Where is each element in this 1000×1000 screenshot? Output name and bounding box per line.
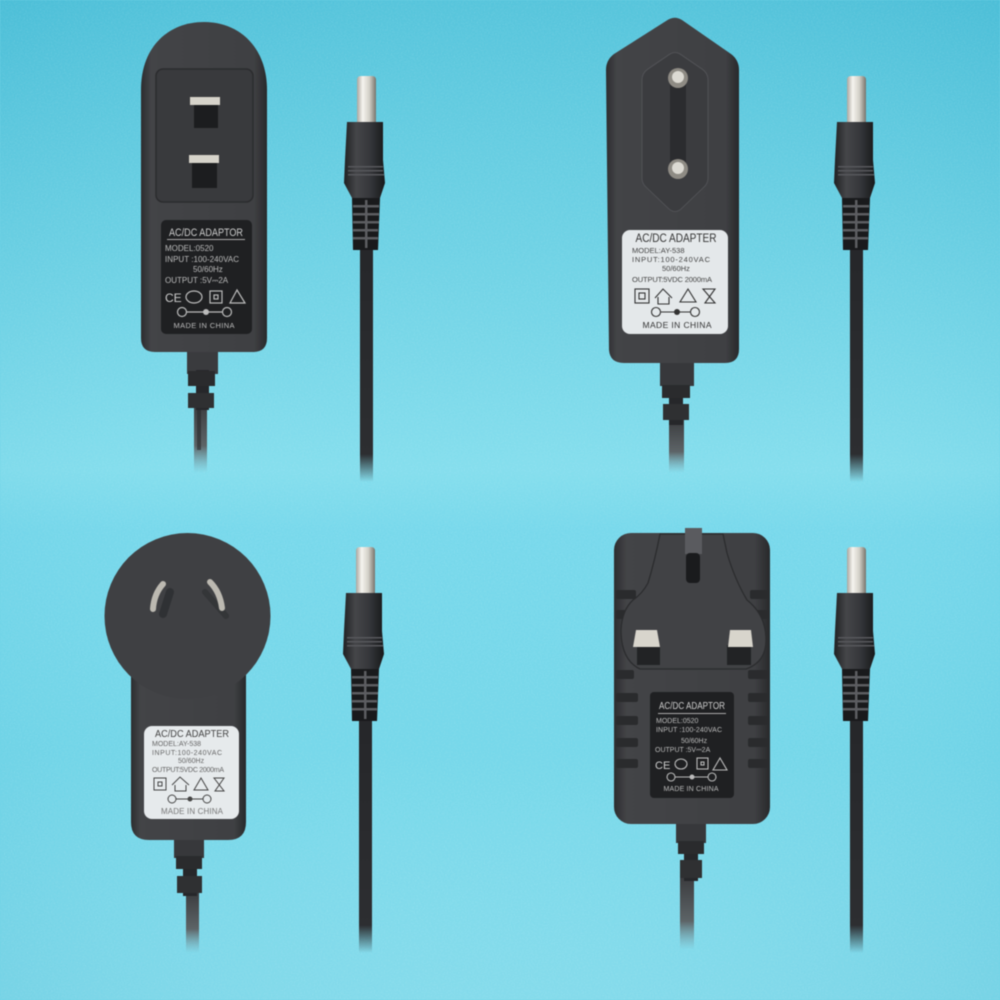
pins xyxy=(668,68,688,179)
rating label: MODEL:AY-538 xyxy=(152,741,201,748)
plug face xyxy=(621,534,766,669)
rating label: INPUT :100-240VAC xyxy=(165,255,239,264)
rating label: 50/60Hz xyxy=(193,265,223,274)
rating label: 50/60Hz xyxy=(681,738,708,745)
rating label: MADE IN CHINA xyxy=(642,320,712,330)
adapter: UK plug xyxy=(614,528,770,950)
rating label: MADE IN CHINA xyxy=(664,786,719,793)
housing xyxy=(141,22,267,352)
line pins xyxy=(633,630,753,665)
rating label: AC/DC ADAPTOR xyxy=(659,700,725,712)
rating label: 50/60Hz xyxy=(178,758,205,765)
rating label: AC/DC ADAPTOR xyxy=(169,227,243,239)
rating label xyxy=(144,726,239,819)
rating label: INPUT:100-240VAC xyxy=(152,750,222,757)
rating label: OUTPUT:5VDC 2000mA xyxy=(632,275,712,284)
adapter: EU plug xyxy=(606,18,739,473)
housing xyxy=(131,670,246,840)
rating label: INPUT :100-240VAC xyxy=(656,727,722,734)
prongs xyxy=(189,97,220,188)
housing xyxy=(606,18,739,363)
plug recess xyxy=(156,69,253,202)
cord and strain relief xyxy=(174,838,204,953)
rating label xyxy=(622,230,728,334)
rating label: CE xyxy=(655,760,670,772)
DC plug: bottom left xyxy=(343,547,384,953)
cord and strain relief xyxy=(187,350,218,473)
DC plug: top right xyxy=(834,76,875,482)
rating label xyxy=(650,692,734,798)
DC plug: bottom right xyxy=(834,547,875,953)
rating label: INPUT:100-240VAC xyxy=(632,255,711,264)
housing xyxy=(614,533,770,824)
cord and strain relief xyxy=(676,823,706,950)
rating label: MODEL:0520 xyxy=(165,244,214,253)
pins xyxy=(153,582,226,616)
plug recess xyxy=(642,52,708,212)
rating label: OUTPUT:5VDC 2000mA xyxy=(152,767,224,774)
rating label: 50/60Hz xyxy=(662,264,690,273)
adapter: US plug xyxy=(141,22,267,473)
rating label: MADE IN CHINA xyxy=(174,321,234,330)
rating label: AC/DC ADAPTER xyxy=(155,728,229,740)
DC plug: top left xyxy=(344,76,385,482)
round plug head xyxy=(104,533,270,699)
side vents xyxy=(616,590,768,768)
rating label: CE xyxy=(165,291,182,305)
cord and strain relief xyxy=(660,361,694,473)
rating label: OUTPUT :5V⎓2A xyxy=(165,276,229,285)
rating label: OUTPUT :5V⎓2A xyxy=(655,747,711,754)
rating label xyxy=(161,220,252,334)
rating label: AC/DC ADAPTER xyxy=(636,233,716,245)
rating label: MODEL:AY-538 xyxy=(632,246,685,255)
rating label: MADE IN CHINA xyxy=(161,807,224,816)
adapter: AU plug xyxy=(104,533,270,953)
earth pin xyxy=(685,528,702,583)
rating label: MODEL:0520 xyxy=(656,718,699,725)
